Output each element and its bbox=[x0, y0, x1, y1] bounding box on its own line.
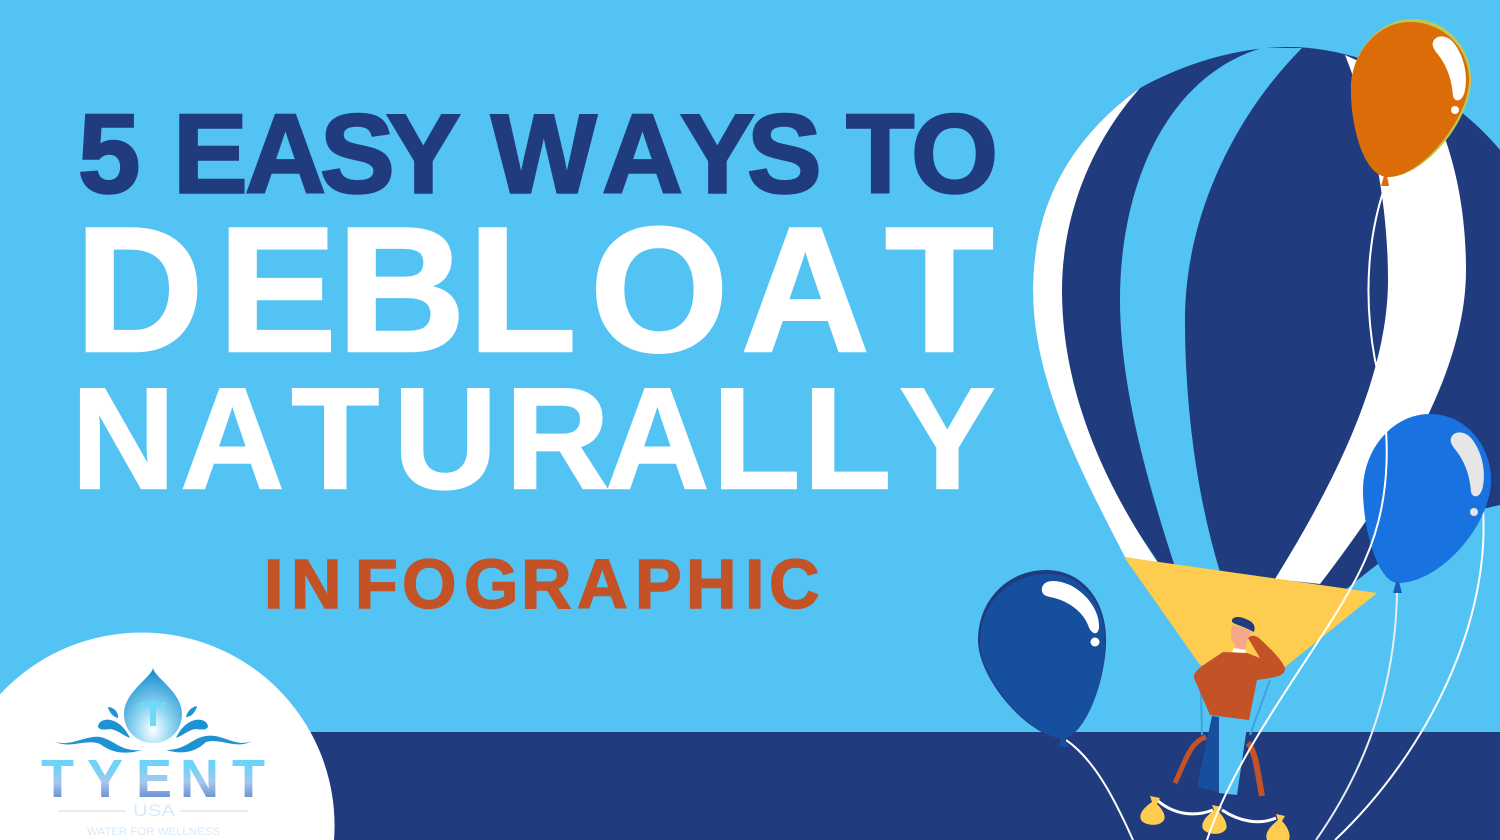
highlight bbox=[1433, 36, 1466, 100]
icon: waves bbox=[54, 736, 252, 753]
balloon: orange bbox=[1351, 19, 1471, 186]
knot bbox=[1059, 737, 1068, 747]
string: orange balloon bbox=[1207, 186, 1387, 840]
logo badge bbox=[0, 633, 335, 840]
hot air balloon envelope bbox=[1033, 47, 1500, 590]
white right stripe bbox=[1275, 55, 1466, 584]
sandbag middle bbox=[1202, 805, 1227, 834]
highlight bbox=[1042, 581, 1099, 633]
sweater bbox=[1194, 636, 1285, 720]
string: blue balloon bbox=[1316, 593, 1397, 840]
icon: water drop bbox=[124, 668, 182, 743]
string: dark balloon bbox=[1066, 740, 1133, 840]
envelope navy base bbox=[1033, 47, 1500, 590]
white left stripe bbox=[1033, 88, 1158, 563]
sandbag left bbox=[1140, 796, 1165, 825]
knot bbox=[1381, 176, 1389, 186]
title line: debloat: DEBLOAT bbox=[75, 190, 994, 389]
sandbags bbox=[1140, 796, 1290, 840]
body bbox=[1351, 22, 1469, 177]
basket ropes bbox=[1201, 680, 1270, 735]
highlight dot bbox=[1470, 508, 1478, 516]
title bbox=[71, 92, 998, 520]
body bbox=[980, 574, 1105, 738]
subtitle: infographic: INFOGRAPHIC bbox=[264, 545, 820, 623]
drop letter T bbox=[140, 702, 166, 726]
rim bbox=[1351, 19, 1471, 177]
highlight dot bbox=[1451, 106, 1459, 114]
logo wordmark: TYENT bbox=[41, 749, 265, 809]
title line: naturally: NATURALLY bbox=[71, 358, 996, 520]
logo USA: USA bbox=[133, 801, 176, 820]
balloon: bright blue bbox=[1363, 414, 1491, 593]
knot bbox=[1393, 582, 1402, 593]
person bbox=[1175, 617, 1285, 796]
trousers light leg bbox=[1219, 717, 1248, 795]
orange left frame bbox=[1175, 737, 1206, 783]
hair bbox=[1232, 617, 1255, 632]
sky stripe bbox=[1120, 48, 1302, 572]
balloon basket funnel bbox=[1124, 557, 1377, 667]
highlight bbox=[1451, 432, 1484, 496]
logo divider lines bbox=[58, 810, 248, 812]
collar bbox=[1232, 648, 1246, 654]
highlight dot bbox=[1090, 638, 1100, 646]
logo tagline: WATER FOR WELLNESS bbox=[87, 826, 220, 838]
sandbag rope bbox=[1158, 801, 1276, 822]
icon: splashes bbox=[98, 706, 208, 738]
neck and face bbox=[1231, 625, 1252, 652]
rim bbox=[978, 570, 1106, 738]
ground band bbox=[0, 732, 1500, 840]
orange right frame bbox=[1248, 743, 1262, 796]
balloon: dark blue bbox=[978, 570, 1106, 747]
trousers dark leg bbox=[1197, 716, 1219, 792]
white circle bbox=[0, 633, 335, 840]
body bbox=[1363, 414, 1491, 583]
sandbag right bbox=[1266, 814, 1290, 840]
title line: 5 easy ways to: 5 EASY WAYS TO bbox=[78, 92, 998, 216]
string: right balloon bbox=[1335, 510, 1484, 840]
